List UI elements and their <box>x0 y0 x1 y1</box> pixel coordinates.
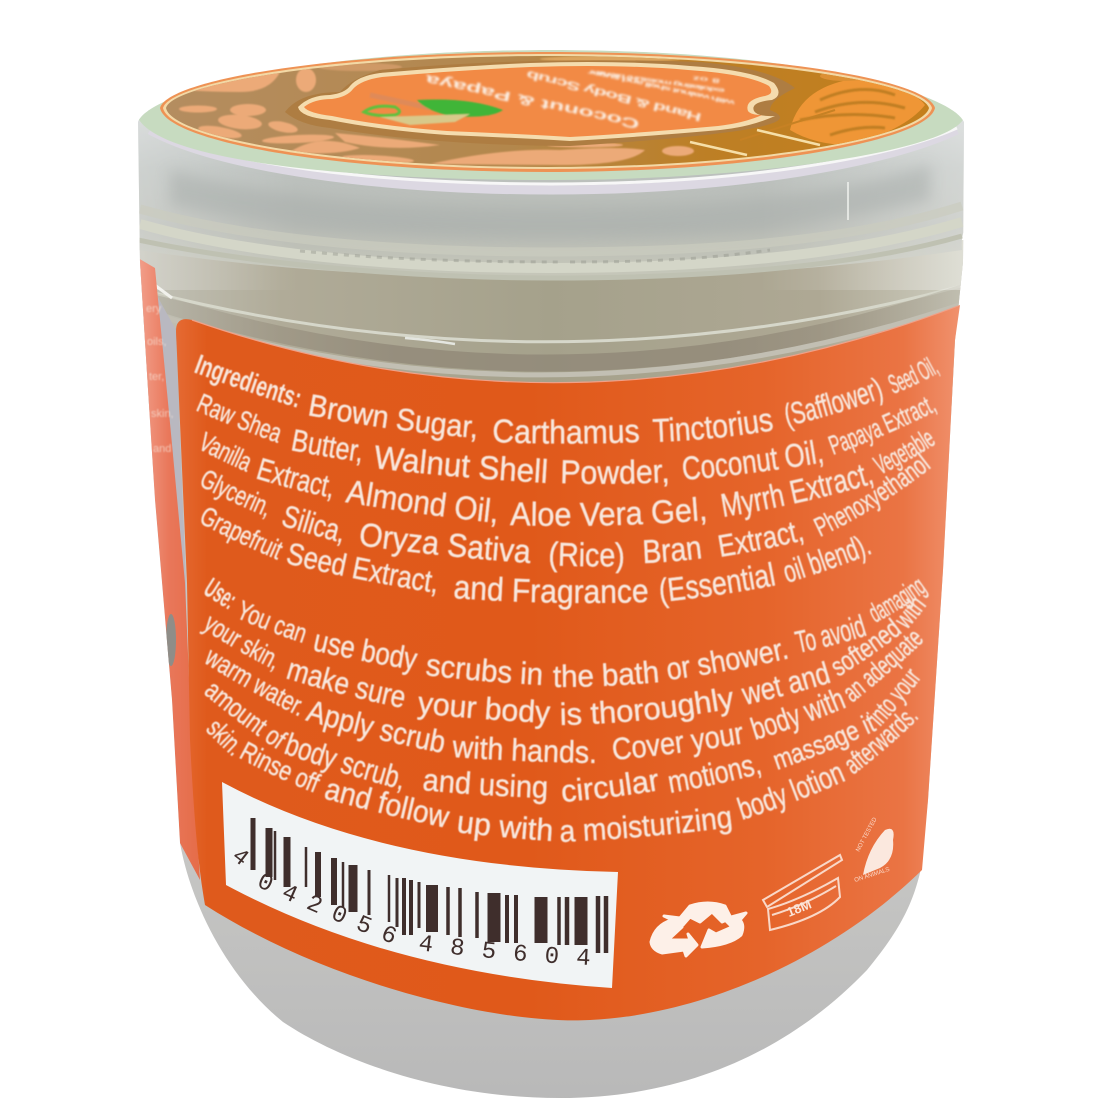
use line 1: You can <box>240 599 306 644</box>
use text block <box>198 576 930 843</box>
ingredients line 2: Raw Shea <box>196 392 281 444</box>
use line 2: wet and <box>738 655 834 712</box>
ingredients line 5: Grapefruit <box>200 507 284 560</box>
barcode digits: 4 <box>227 843 254 872</box>
use line 3: warm water. <box>199 641 311 722</box>
ingredients line 4: Bran <box>643 539 702 564</box>
cap ridge <box>140 222 962 268</box>
glass gap between strip and label <box>158 298 186 600</box>
neck below the cap <box>130 240 970 410</box>
label top edge light line <box>192 306 958 383</box>
plaque cream border <box>298 62 779 141</box>
cap vertical seam <box>847 182 849 220</box>
use line 1: or shower. <box>666 642 788 680</box>
use line 5: and follow <box>321 771 453 835</box>
lid upside-down text <box>423 68 737 131</box>
brown plaque shadow <box>285 60 795 146</box>
ingredients line 4 <box>200 454 932 574</box>
lid upside-down text: with walnut shell and sugar <box>586 68 737 106</box>
ingredients line 3: Extract, <box>256 457 332 502</box>
lid upside-down text: Hand & Body Scrub <box>525 68 703 124</box>
side strip text <box>146 303 174 455</box>
ingredients line 1: Carthamus <box>492 418 640 445</box>
ingredients line 5: Seed Extract, <box>286 542 436 598</box>
label cream ring <box>163 54 932 169</box>
use line 5: body lotion <box>733 755 849 827</box>
ornaments right <box>690 71 925 155</box>
ingredients line 5: and Fragrance <box>454 576 648 611</box>
use line 4: body scrub, <box>281 727 410 797</box>
use line 1: Use: <box>204 576 236 610</box>
ingredients line 4: Extract, <box>718 522 804 558</box>
ingredients line 3: Aloe Vera Gel, <box>509 496 706 528</box>
use line 4: massage it <box>769 708 880 776</box>
use line 5: a moisturizing <box>559 799 734 849</box>
barcode digits: 042056 <box>253 869 400 952</box>
ingredients line 3 <box>201 430 936 528</box>
logo <box>364 95 503 125</box>
use line 2: make sure <box>286 662 406 708</box>
use line 4 <box>204 668 920 806</box>
ingredients line 2: Coconut Oil, <box>682 439 824 480</box>
ingredients line 5 <box>200 507 872 611</box>
label pattern <box>166 56 929 167</box>
use line 5: up with <box>455 804 555 848</box>
use line 3: an adequate <box>837 623 929 708</box>
use line 3: Apply scrub <box>303 693 448 760</box>
use line 1: scrubs in <box>426 658 542 686</box>
ingredients line 2: Butter, <box>291 428 361 466</box>
cap darker band <box>170 165 930 240</box>
use line 2: your skin, <box>198 615 276 673</box>
side strip text: ter, <box>149 371 164 383</box>
lid upside-down text: 8 oz <box>692 74 720 84</box>
use line 2: your body <box>416 685 552 730</box>
icon: cruelty free rabbit: ON ANIMALS <box>854 867 891 884</box>
lid upside-down text: Coconut & Papaya <box>423 71 641 131</box>
use line 5: Rinse off <box>235 736 324 799</box>
ingredients line 4: Oryza Sativa <box>360 522 532 564</box>
use line 2: with <box>888 590 932 634</box>
use line 4: and using <box>421 762 549 805</box>
use line 3: Cover your <box>610 715 746 767</box>
ingredients line 1: Tinctorius <box>652 410 774 443</box>
ingredients line 5: oil blend). <box>784 535 872 583</box>
use line 2 <box>198 598 927 730</box>
use line 4: motions, <box>665 746 765 800</box>
use line 1 <box>204 576 930 688</box>
side strip text: ery <box>146 303 162 315</box>
orange back label <box>176 305 960 1020</box>
ingredients line 1 <box>194 354 941 445</box>
use line 2: is thoroughly <box>559 680 737 732</box>
ingredients text block <box>194 354 941 611</box>
icon: cruelty free rabbit <box>854 816 894 884</box>
use line 1: damaging <box>869 578 930 623</box>
ingredients line 2: Papaya Extract, <box>827 396 938 456</box>
rim highlight <box>150 130 957 190</box>
side strip text: oils, <box>147 336 167 348</box>
ornaments left <box>179 56 694 165</box>
label outer orange edge <box>160 52 935 172</box>
use line 3: with hands. <box>451 729 597 770</box>
use line 2: softened <box>825 613 907 682</box>
ingredients line 5: (Essential <box>660 561 776 610</box>
side strip text: and <box>153 443 171 455</box>
ingredients line 4: Silica, <box>282 505 342 547</box>
cap side <box>130 110 970 277</box>
use line 4: circular <box>560 762 661 809</box>
use line 3: body with <box>747 681 850 747</box>
use line 4: amount of <box>199 675 292 755</box>
ingredients line 1: Brown Sugar, <box>308 394 476 443</box>
ingredients line 4: Glycerin, <box>200 470 268 520</box>
lid upside-down text: exfoliating moisture blend <box>596 69 725 94</box>
icon: open jar 18M <box>763 855 842 930</box>
ingredients line 2 <box>196 392 938 488</box>
barcode digits <box>227 843 590 965</box>
use line 3 <box>204 631 924 764</box>
ingredients line 1: Seed Oil, <box>887 356 941 394</box>
dark patch <box>166 614 176 666</box>
icon: open jar 18M: 18M <box>785 896 814 920</box>
jar photo <box>130 50 970 1110</box>
lid top label <box>160 50 940 175</box>
use line 5 <box>206 712 919 843</box>
left side wrap label strip <box>138 258 200 880</box>
icon: recycling <box>651 903 746 956</box>
use line 4: into your <box>862 663 926 731</box>
icon: cruelty free rabbit: NOT TESTED <box>855 816 879 853</box>
barcode white panel <box>222 782 618 988</box>
side strip text: skin, <box>151 408 174 420</box>
ingredients line 4: (Rice) <box>549 540 624 574</box>
ingredients line 3: Vegetable <box>871 430 936 474</box>
pale green rim <box>138 50 964 180</box>
use line 1: the bath <box>552 660 659 688</box>
cap edge highlights <box>138 120 964 290</box>
ingredients line 2: Powder, <box>562 458 668 488</box>
ingredients line 1: Ingredients: <box>194 354 301 408</box>
ingredients line 3: Almond Oil, <box>344 480 496 528</box>
use line 5: skin. <box>201 713 249 761</box>
ingredients line 3: Vanilla <box>201 430 251 473</box>
use line 1: use body <box>314 634 418 676</box>
ingredients line 3: Myrrh Extract, <box>720 464 874 521</box>
barcode bars <box>253 818 606 953</box>
plaque orange <box>304 66 771 137</box>
ingredients line 4: Phenoxyethanol <box>812 454 932 538</box>
ingredients line 1: (Safflower) <box>784 377 884 432</box>
panel lines <box>690 130 820 155</box>
barcode <box>222 782 618 988</box>
barcode digits: 485604 <box>417 931 591 973</box>
ingredients line 2: Walnut Shell <box>374 444 548 484</box>
neck shoulder bands <box>156 284 961 378</box>
use line 1: To avoid <box>793 613 868 653</box>
use line 5: afterwards. <box>838 700 924 780</box>
jar body base <box>130 240 970 1110</box>
